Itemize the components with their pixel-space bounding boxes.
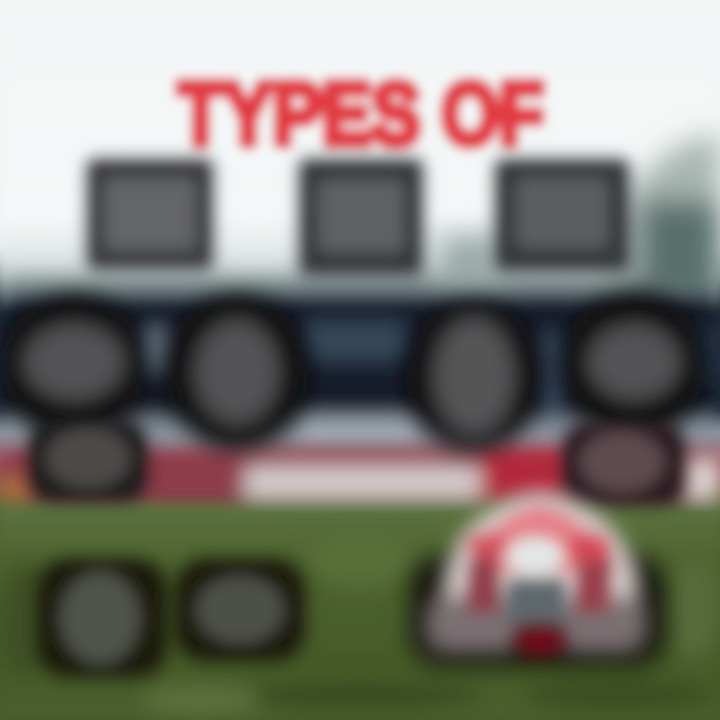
panel: top left: [86, 158, 214, 270]
football: red and pink panels: [466, 505, 612, 612]
football: dark backing: [410, 556, 666, 666]
background: grass mottling: [0, 534, 720, 714]
background: stand band: [0, 296, 720, 444]
background: red and white strip: [0, 448, 720, 502]
panel: top centre: [298, 158, 424, 276]
heading: TYPES OF: [178, 64, 544, 163]
badge: row one, third: [406, 300, 542, 452]
badge: row one, first: [2, 294, 146, 438]
badge: field centre: [174, 558, 306, 662]
football: centre panels: [505, 536, 566, 656]
badge: row one, second: [165, 294, 309, 450]
background: distant trees: [0, 135, 720, 302]
badge: row one, fourth: [562, 292, 706, 436]
illustration: football: [410, 492, 666, 666]
background: sky: [0, 0, 720, 305]
football: ball body: [426, 492, 646, 652]
panel: top right: [494, 158, 630, 272]
background: grass field: [0, 506, 720, 720]
badge: lower left: [28, 420, 148, 502]
badge: field left: [36, 558, 168, 678]
badge: lower right: [562, 422, 686, 506]
